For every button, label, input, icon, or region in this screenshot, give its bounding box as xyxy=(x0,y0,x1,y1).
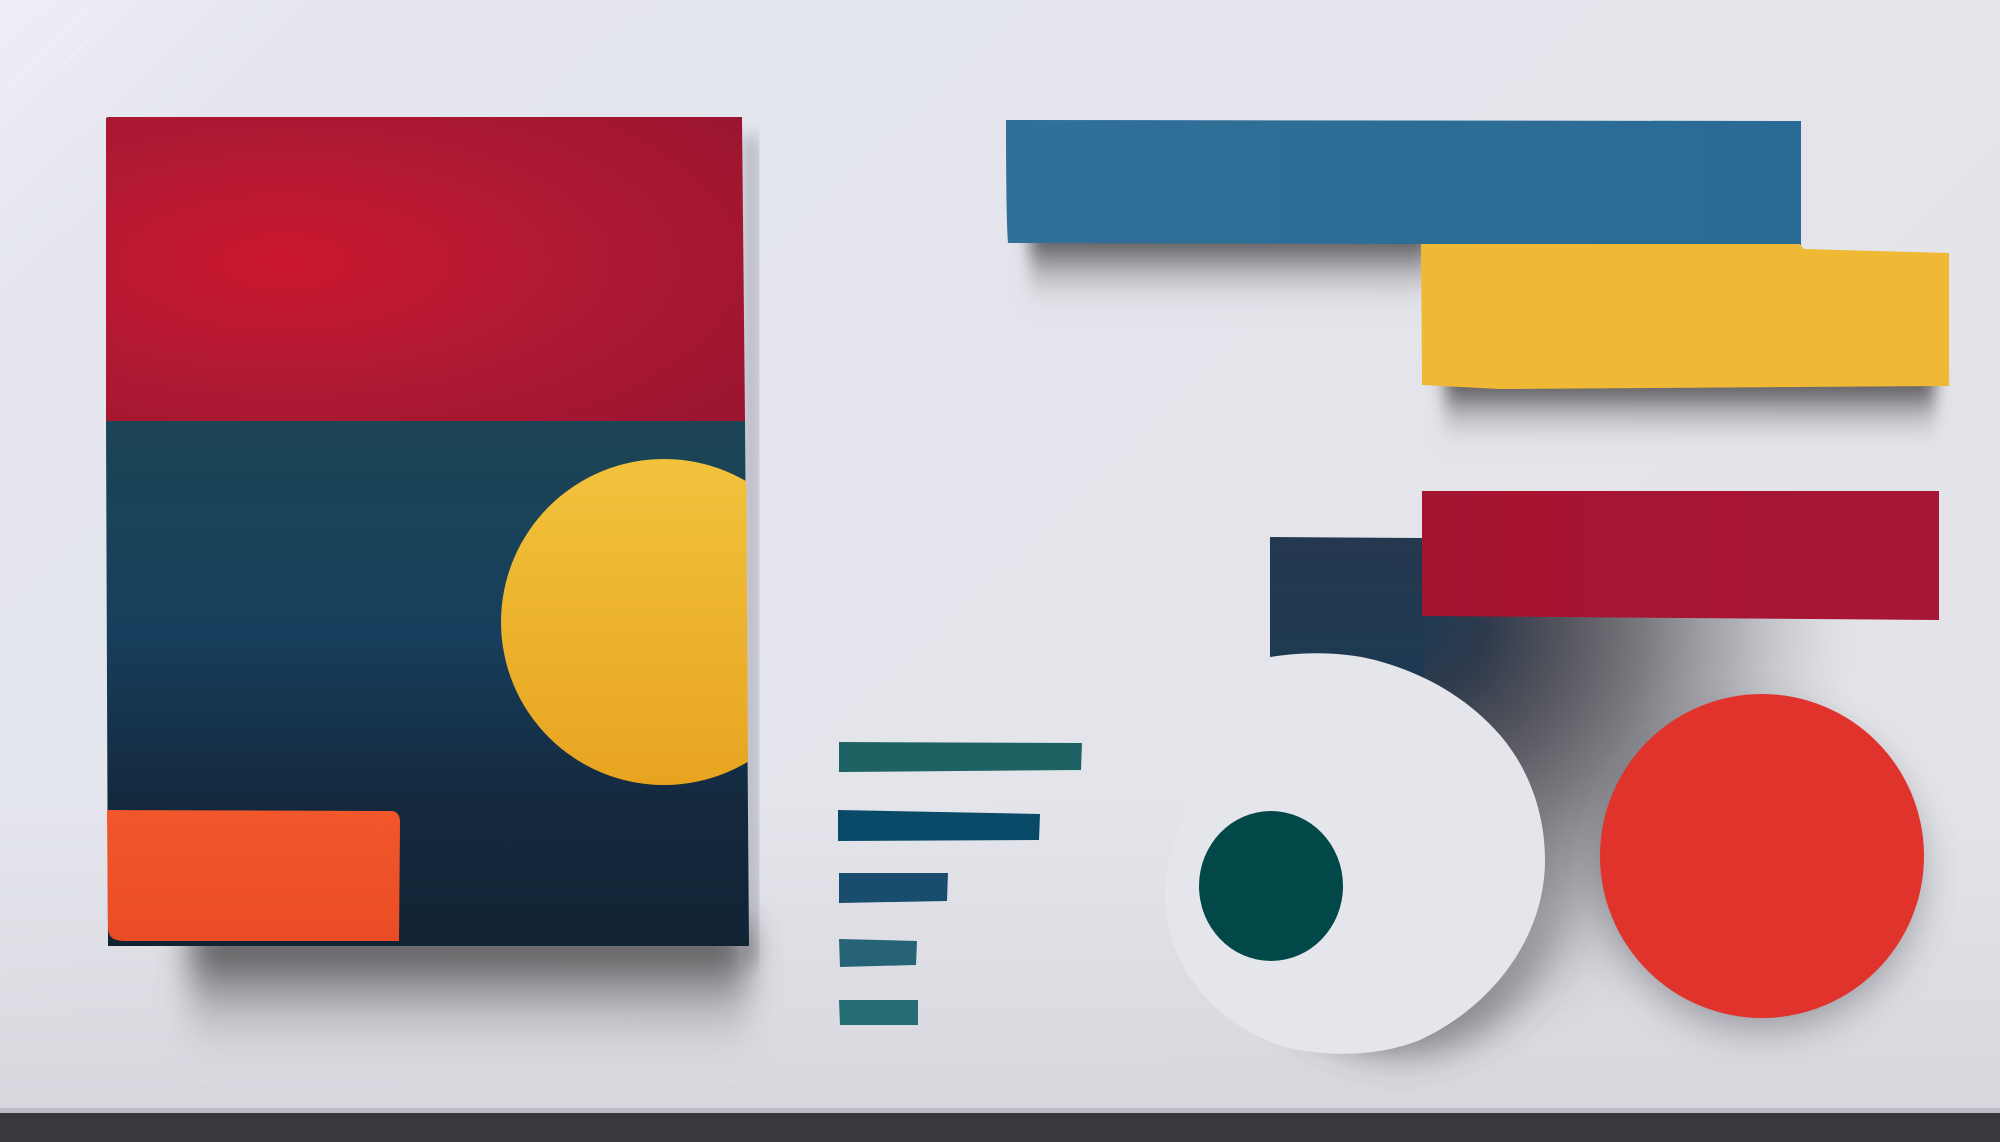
white blob xyxy=(1165,653,1545,1054)
shadow: white blob and navy block xyxy=(1238,600,1960,1070)
red circle xyxy=(1600,694,1924,1018)
blue bar xyxy=(1006,120,1801,245)
yellow circle xyxy=(501,459,748,785)
orange rectangle xyxy=(107,810,400,941)
shadow: large panel xyxy=(190,135,758,1065)
shadow: blue bar xyxy=(1030,225,1430,310)
bar 5 xyxy=(839,1000,918,1025)
bar 4 xyxy=(839,939,917,967)
navy lower section xyxy=(106,421,749,946)
bar list xyxy=(838,742,1082,1025)
crimson bar xyxy=(1422,491,1939,620)
dark navy block xyxy=(1270,537,1425,680)
bar 2 xyxy=(838,810,1040,841)
red upper section xyxy=(106,117,745,421)
bar 3 xyxy=(839,873,948,903)
teal circle xyxy=(1199,811,1343,961)
yellow bar xyxy=(1421,244,1949,389)
dark floor strip xyxy=(0,1108,2000,1142)
shadow: red circle xyxy=(1604,714,1920,1030)
shadow: yellow bar xyxy=(1445,372,1935,447)
white blob with green circle xyxy=(1165,653,1545,1054)
bar 1 xyxy=(839,742,1082,772)
panel: large colour block xyxy=(106,117,827,1065)
